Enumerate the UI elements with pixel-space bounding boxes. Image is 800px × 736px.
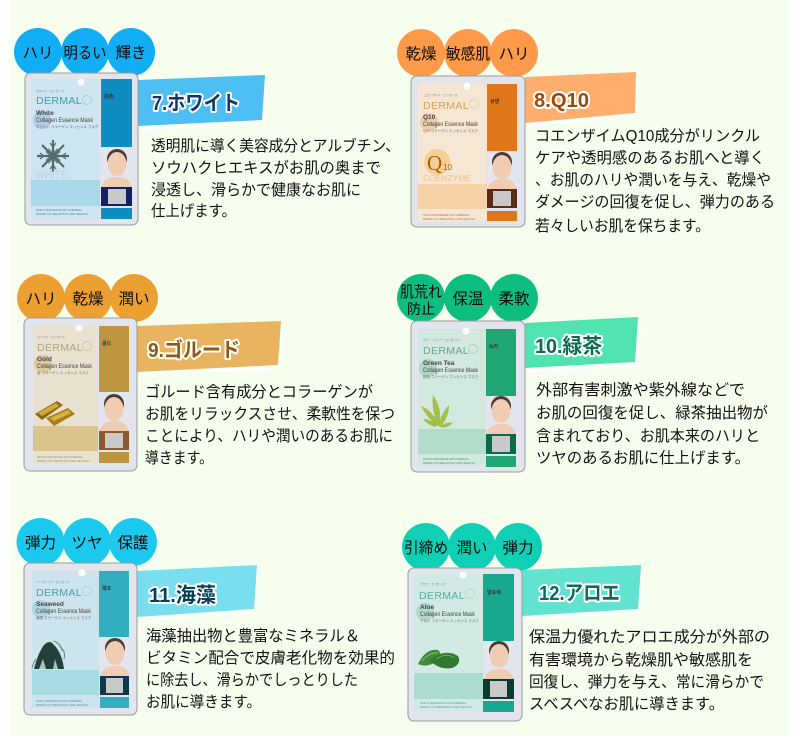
description text: seaweed: 海藻抽出物と豊富なミネラル＆ bbox=[146, 627, 360, 645]
benefit badges: green tea: 防止 bbox=[407, 301, 435, 317]
description text: green tea: お肌の回復を促し、緑茶抽出物が bbox=[536, 404, 768, 422]
title ribbon: aloe: 12.アロエ bbox=[539, 582, 620, 605]
description text: gold: ゴルード含有成分とコラーゲンが bbox=[145, 382, 373, 401]
mask package: aloe: 알로에 bbox=[487, 589, 501, 596]
benefit badges: seaweed: ツヤ bbox=[71, 535, 103, 552]
mask package: Q10: Collagen Essence Mask bbox=[423, 121, 479, 128]
description text: green tea bbox=[536, 381, 768, 467]
benefit badges: aloe bbox=[402, 523, 542, 571]
benefit badges: seaweed: 弾力 bbox=[25, 534, 56, 552]
title ribbon: seaweed bbox=[137, 565, 260, 621]
mask package: seaweed: 해조 bbox=[102, 585, 112, 592]
title ribbon: gold bbox=[137, 321, 284, 376]
mask package: white bbox=[25, 73, 138, 225]
mask package: gold: Gold bbox=[37, 356, 52, 363]
mask package: green tea: MAKES YOU BEAUTIFUL AND HEALTHY bbox=[423, 461, 476, 465]
mask package: Q10: Q10 bbox=[423, 114, 436, 121]
benefit badges: green tea: 保温 bbox=[452, 290, 484, 308]
mask package: Q10 bbox=[411, 76, 525, 227]
icon: snowflake bbox=[37, 140, 69, 172]
mask package: white: ホワイト コラーゲン エッセンス マスク bbox=[36, 124, 99, 129]
benefit badges: aloe: 引締め bbox=[404, 539, 448, 557]
mask package: gold: 金 コラーゲン エッセンス マスク bbox=[37, 370, 89, 375]
mask package: gold: DERMAL bbox=[37, 342, 83, 354]
title ribbon: seaweed: 11.海藻 bbox=[149, 584, 216, 607]
description text: white: 仕上げます。 bbox=[151, 202, 236, 220]
benefit badges: Q10: 乾燥 bbox=[405, 45, 437, 63]
icon: seaweed bbox=[32, 641, 64, 669]
mask package: green tea: Green Tea bbox=[423, 360, 455, 367]
panel: 9 gold bbox=[17, 274, 395, 471]
mask package: Q10: SKIN CONFIDENCE WITH DERMAL bbox=[423, 213, 470, 217]
benefit badges: gold: ハリ bbox=[25, 291, 57, 308]
icon: Q10 logo: COENZYME bbox=[423, 173, 471, 183]
mask package: seaweed: DERMAL bbox=[36, 587, 82, 599]
mask package: Q10: MAKES YOU BEAUTIFUL AND HEALTHY bbox=[423, 217, 476, 221]
description text: white bbox=[151, 136, 400, 220]
description text: gold: お肌をリラックスさせ、柔軟性を保つ bbox=[145, 405, 395, 423]
mask package: white: SKIN CONFIDENCE WITH DERMAL bbox=[36, 208, 83, 212]
icon: Q10 logo bbox=[423, 149, 471, 183]
description text: aloe bbox=[529, 628, 770, 713]
description text: white: 透明肌に導く美容成分とアルブチン、 bbox=[151, 136, 400, 155]
description text: Q10 bbox=[535, 127, 775, 235]
description text: green tea: ツヤのあるお肌に仕上げます。 bbox=[536, 449, 750, 467]
mask package: gold: ゴールド・エッセンス bbox=[37, 335, 65, 339]
benefit badges: white: ハリ bbox=[22, 45, 54, 62]
mask package: aloe bbox=[408, 568, 522, 721]
mask package: white: White bbox=[36, 110, 54, 117]
icon: green tea leaves bbox=[421, 395, 453, 428]
title ribbon: gold: 9.ゴルード bbox=[148, 338, 240, 362]
mask package: green tea: DERMAL bbox=[423, 345, 469, 357]
description text: Q10: 若々しいお肌を保ちます。 bbox=[535, 217, 710, 235]
benefit badges: white: 輝き bbox=[115, 44, 147, 62]
mask package: white: 白色 bbox=[104, 93, 114, 100]
description text: gold bbox=[145, 382, 395, 467]
benefit badges: green tea: 柔軟 bbox=[498, 290, 530, 308]
benefit badges: seaweed: 保護 bbox=[117, 534, 149, 552]
title ribbon: aloe bbox=[522, 565, 644, 620]
mask package: Q10: 큐텐 bbox=[490, 98, 500, 105]
description text: seaweed: に除去し、滑らかでしっとりした bbox=[146, 671, 358, 689]
mask package: white: ホワイト・エッセンス bbox=[36, 89, 64, 93]
mask package: green tea bbox=[411, 321, 525, 472]
benefit badges: Q10 bbox=[397, 29, 538, 77]
benefit badges: Q10: 敏感肌 bbox=[446, 45, 490, 63]
mask package: gold: SKIN CONFIDENCE WITH DERMAL bbox=[37, 455, 84, 459]
mask package: seaweed bbox=[24, 563, 137, 715]
icon: aloe leaves bbox=[418, 650, 459, 668]
mask package: seaweed: 海藻 コラーゲン エッセンス マスク bbox=[36, 615, 92, 620]
mask package: green tea: 녹차 bbox=[489, 343, 499, 350]
benefit badges: gold: 乾燥 bbox=[72, 290, 104, 308]
mask package: seaweed: MAKES YOU BEAUTIFUL AND HEALTHY bbox=[36, 703, 89, 707]
description text: aloe: 保温力優れたアロエ成分が外部の bbox=[529, 628, 770, 646]
mask package: aloe: Collagen Essence Mask bbox=[420, 611, 476, 618]
icon: gold bars bbox=[35, 401, 75, 426]
icon: Q10 logo: 10 bbox=[443, 163, 452, 172]
mask package: green tea: 緑茶 コラーゲン エッセンス マスク bbox=[423, 374, 479, 379]
description text: aloe: 有害環境から乾燥肌や敏感肌を bbox=[529, 651, 753, 669]
benefit badges: aloe: 弾力 bbox=[502, 539, 534, 557]
description text: Q10: ケアや透明感のあるお肌へと導く bbox=[535, 149, 765, 167]
mask package: aloe: アロエ・エッセンス bbox=[420, 582, 445, 586]
title ribbon: white: 7.ホワイト bbox=[152, 92, 240, 115]
benefit badges: gold: 潤い bbox=[118, 290, 150, 308]
mask package: aloe: DERMAL bbox=[419, 590, 465, 602]
benefit badges: white bbox=[14, 28, 155, 76]
icon: Q10 logo: Q bbox=[427, 151, 442, 175]
title ribbon: Q10: 8.Q10 bbox=[534, 89, 589, 112]
mask package: aloe: MAKES YOU BEAUTIFUL AND HEALTHY bbox=[420, 705, 473, 709]
description text: Q10: ダメージの回復を促し、弾力のある bbox=[535, 193, 775, 211]
mask package: gold bbox=[24, 318, 137, 471]
title ribbon: green tea: 10.緑茶 bbox=[535, 335, 602, 358]
title ribbon: green tea bbox=[525, 317, 641, 372]
description text: seaweed: ビタミン配合で皮膚老化物を効果的 bbox=[146, 649, 395, 667]
mask package: Q10: DERMAL bbox=[423, 100, 469, 112]
panel: 12 aloe bbox=[402, 523, 770, 721]
panel: 10 green tea bbox=[397, 274, 768, 472]
mask package: seaweed: シーウィード・エッセンス bbox=[36, 580, 70, 584]
mask package: gold: Collagen Essence Mask bbox=[37, 363, 93, 370]
mask package: white: WHITE bbox=[35, 170, 68, 182]
mask package: green tea: グリーンティー・エッセンス bbox=[423, 338, 459, 342]
mask package: green tea: SKIN CONFIDENCE WITH DERMAL bbox=[423, 457, 470, 461]
mask package: seaweed: Collagen Essence Mask bbox=[36, 608, 92, 615]
panel: 8 Q10 bbox=[397, 29, 775, 235]
mask package: aloe: SKIN CONFIDENCE WITH DERMAL bbox=[420, 701, 467, 705]
description text: white: 浸透し、滑らかで健康なお肌に bbox=[151, 181, 361, 199]
mask package: Q10: Q10 コラーゲン エッセンス マスク bbox=[423, 128, 478, 133]
mask package: white: DERMAL bbox=[36, 95, 82, 107]
mask package: white: Collagen Essence Mask bbox=[36, 117, 94, 124]
description text: Q10: コエンザイムQ10成分がリンクル bbox=[535, 127, 760, 145]
description text: seaweed: お肌に導きます。 bbox=[146, 693, 261, 711]
panel: 11 seaweed bbox=[16, 518, 395, 715]
description text: seaweed bbox=[146, 627, 395, 711]
description text: gold: 導きます。 bbox=[145, 449, 213, 467]
description text: Q10: 、お肌のハリや潤いを与え、乾燥や bbox=[535, 171, 771, 189]
benefit badges: green tea bbox=[397, 274, 538, 322]
mask package: aloe: Aloe bbox=[420, 604, 434, 611]
mask package: seaweed: SKIN CONFIDENCE WITH DERMAL bbox=[36, 699, 83, 703]
benefit badges: gold bbox=[17, 274, 158, 322]
benefit badges: green tea: 肌荒れ bbox=[400, 283, 442, 301]
mask package: aloe: アロエ コラーゲン エッセンス マスク bbox=[420, 618, 479, 623]
mask package: gold: MAKES YOU BEAUTIFUL AND HEALTHY bbox=[37, 459, 90, 463]
mask package: green tea: Collagen Essence Mask bbox=[423, 367, 479, 374]
mask package: Q10: コエンザイム・エッセンス bbox=[424, 93, 458, 97]
mask package: seaweed: Seaweed bbox=[36, 601, 64, 608]
description text: white: ソウハクヒエキスがお肌の奥まで bbox=[151, 159, 381, 177]
description text: aloe: 回復し、弾力を与え、常に滑らかで bbox=[529, 673, 764, 691]
description text: gold: ことにより、ハリや潤いのあるお肌に bbox=[145, 427, 393, 445]
benefit badges: aloe: 潤い bbox=[456, 539, 488, 557]
mask package: gold: 골드 bbox=[102, 341, 112, 347]
title ribbon: Q10 bbox=[525, 72, 639, 127]
title ribbon: white bbox=[138, 75, 268, 130]
panel: 7 white bbox=[14, 28, 400, 225]
benefit badges: Q10: ハリ bbox=[498, 46, 530, 63]
mask package: white: MAKES YOU BEAUTIFUL AND HEALTHY bbox=[36, 212, 89, 216]
benefit badges: white: 明るい bbox=[64, 45, 106, 62]
description text: green tea: 外部有害刺激や紫外線などで bbox=[536, 381, 745, 399]
benefit badges: seaweed bbox=[16, 518, 157, 566]
description text: green tea: 含まれており、お肌本来のハリと bbox=[536, 427, 760, 445]
description text: aloe: スベスベなお肌に導きます。 bbox=[529, 695, 724, 713]
